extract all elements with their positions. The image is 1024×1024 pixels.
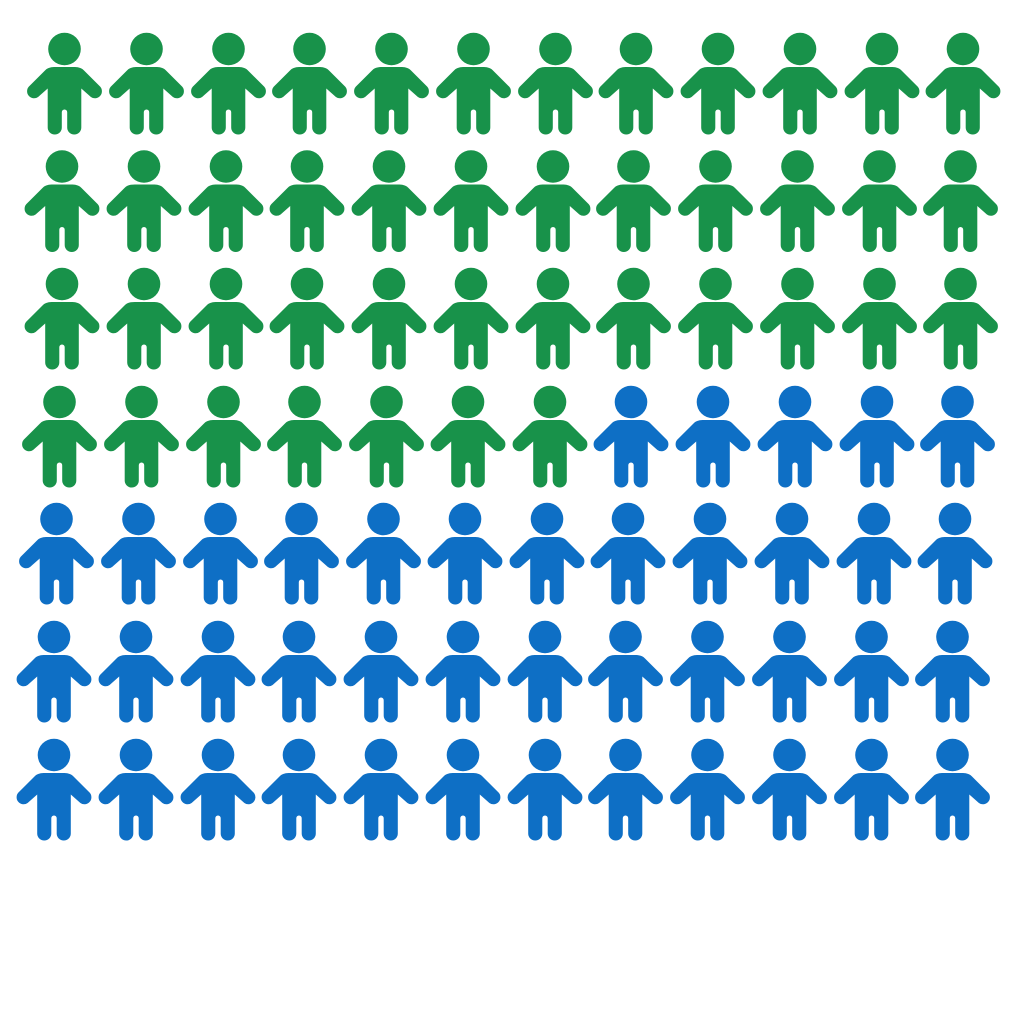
person — [670, 621, 745, 723]
person — [189, 268, 263, 370]
person — [186, 386, 261, 488]
person — [596, 150, 671, 252]
person — [508, 739, 582, 841]
row 1: green people — [27, 33, 1000, 135]
person — [518, 33, 593, 135]
person — [516, 150, 590, 252]
person — [760, 150, 835, 252]
person — [845, 33, 919, 135]
person — [181, 621, 255, 723]
person — [101, 503, 176, 605]
person — [22, 386, 97, 488]
person — [344, 739, 418, 841]
row 7: blue people — [17, 739, 990, 841]
person — [352, 268, 426, 370]
person — [107, 268, 181, 370]
person — [923, 268, 998, 370]
person — [262, 621, 336, 723]
person — [508, 621, 582, 723]
person — [346, 503, 421, 605]
person — [428, 503, 502, 605]
person — [920, 386, 995, 488]
person — [272, 33, 347, 135]
person — [596, 268, 671, 370]
person — [752, 739, 827, 841]
person — [513, 386, 587, 488]
person — [17, 621, 91, 723]
row 6: blue people — [17, 621, 990, 723]
person — [915, 621, 990, 723]
row 2: green people — [25, 150, 998, 252]
person — [594, 386, 668, 488]
person — [588, 621, 663, 723]
person — [510, 503, 584, 605]
person — [760, 268, 835, 370]
person — [27, 33, 102, 135]
person — [834, 739, 909, 841]
person — [915, 739, 990, 841]
person — [434, 268, 508, 370]
person — [588, 739, 663, 841]
person — [591, 503, 665, 605]
person — [834, 621, 909, 723]
person — [344, 621, 418, 723]
person — [673, 503, 747, 605]
person — [183, 503, 258, 605]
person — [270, 268, 344, 370]
person — [189, 150, 263, 252]
person — [840, 386, 914, 488]
person — [670, 739, 745, 841]
person — [837, 503, 911, 605]
person — [107, 150, 181, 252]
person — [270, 150, 344, 252]
person — [191, 33, 266, 135]
person — [434, 150, 508, 252]
person — [842, 268, 917, 370]
person — [264, 503, 339, 605]
person — [918, 503, 992, 605]
person — [678, 150, 753, 252]
person — [104, 386, 179, 488]
person — [25, 268, 99, 370]
person — [25, 150, 99, 252]
person — [99, 739, 173, 841]
person — [763, 33, 837, 135]
person — [426, 739, 500, 841]
person — [842, 150, 917, 252]
person — [99, 621, 173, 723]
row 5: blue people — [19, 503, 992, 605]
person — [262, 739, 336, 841]
person — [676, 386, 750, 488]
person — [181, 739, 255, 841]
person — [431, 386, 505, 488]
person — [678, 268, 753, 370]
person — [17, 739, 91, 841]
person — [354, 33, 429, 135]
person — [267, 386, 342, 488]
person — [426, 621, 500, 723]
person — [681, 33, 755, 135]
person — [436, 33, 511, 135]
person — [755, 503, 829, 605]
person — [109, 33, 184, 135]
row 4: seven green people — [22, 386, 587, 488]
person — [516, 268, 590, 370]
person — [923, 150, 998, 252]
person — [352, 150, 426, 252]
person — [599, 33, 673, 135]
person — [19, 503, 94, 605]
row 4: five blue people — [594, 386, 995, 488]
person — [349, 386, 424, 488]
row 3: green people — [25, 268, 998, 370]
person — [926, 33, 1000, 135]
person — [758, 386, 832, 488]
person — [752, 621, 827, 723]
